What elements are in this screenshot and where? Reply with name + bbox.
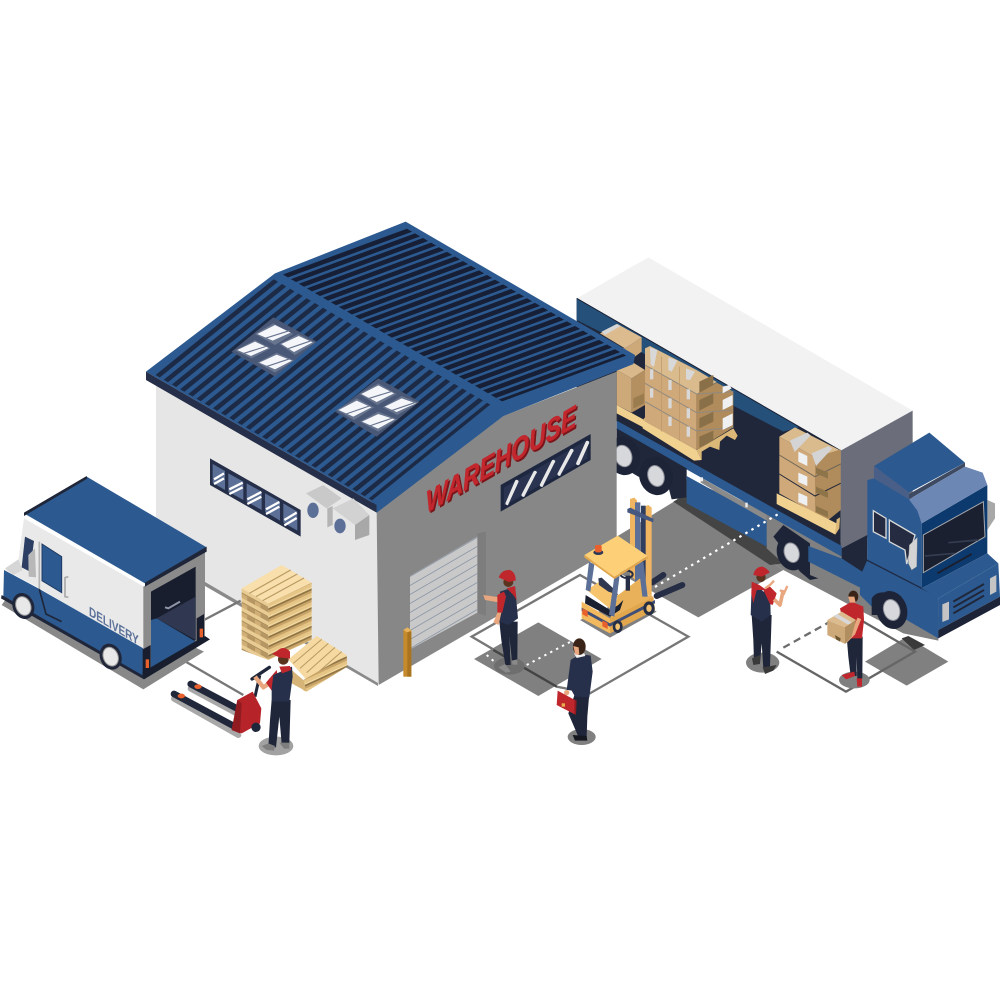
skylight 1 — [232, 317, 317, 377]
tall stack end faces — [268, 583, 312, 660]
box — [827, 612, 856, 644]
white wall base strip — [205, 580, 378, 686]
shirt — [497, 592, 506, 613]
bumper bottom — [938, 597, 1000, 638]
marked rectangle — [777, 622, 915, 692]
near hand — [765, 581, 774, 588]
windshield lower slot — [937, 554, 972, 573]
trousers — [568, 693, 589, 737]
seat back — [598, 578, 618, 595]
air conditioning units — [306, 485, 369, 540]
trailer chassis — [617, 428, 687, 499]
legs — [847, 637, 863, 679]
trailer roof — [577, 257, 913, 451]
shirt shoulder — [507, 586, 517, 600]
white side panel — [5, 518, 144, 648]
sign: WAREHOUSE: WAREHOUSE — [425, 398, 578, 519]
ground shadow — [494, 657, 525, 675]
window — [22, 537, 34, 572]
front gable window — [501, 434, 591, 512]
handle grip — [252, 667, 269, 679]
roof left panel — [146, 273, 502, 505]
red shirt — [840, 602, 864, 638]
roof — [24, 477, 207, 583]
safety post — [403, 627, 411, 677]
grille panel — [938, 563, 1000, 630]
box divisions — [645, 365, 733, 431]
headlight left — [942, 602, 949, 622]
shipping labels — [723, 385, 733, 430]
bumper top — [922, 553, 998, 598]
mast — [627, 498, 654, 597]
legs — [752, 615, 772, 668]
roller door — [410, 537, 477, 649]
delivery van — [1, 476, 210, 689]
arm — [255, 677, 273, 687]
cab pillars — [586, 562, 648, 617]
body tower — [610, 578, 653, 619]
front trailer wheel — [772, 525, 818, 580]
front pallet stack — [777, 427, 841, 535]
roller door and post — [403, 532, 486, 677]
rear dark pillars — [143, 614, 204, 677]
forklift shadow — [580, 597, 657, 638]
dotted route to truck — [655, 513, 780, 587]
forks — [652, 575, 682, 596]
grey standing zone — [474, 622, 602, 696]
dark patch — [902, 636, 925, 650]
dark marking line — [493, 650, 557, 687]
hard hat — [753, 567, 770, 577]
floor markings by the forklift — [472, 575, 688, 696]
marked rectangle — [472, 575, 688, 693]
forklift wheels — [613, 601, 655, 633]
door seam — [37, 542, 42, 589]
rear bumper — [142, 636, 210, 679]
red shirt — [763, 587, 777, 605]
handle — [253, 677, 259, 697]
face — [573, 646, 579, 655]
windshield — [923, 502, 985, 573]
door recess — [477, 532, 486, 616]
worker carrying box — [827, 591, 870, 688]
legs — [499, 622, 518, 665]
main stack left face — [645, 348, 697, 450]
cargo opening — [151, 567, 196, 667]
hood — [5, 559, 23, 575]
main stack right face — [697, 383, 733, 450]
grille slats — [953, 584, 984, 613]
seat deck — [587, 582, 618, 610]
shoes — [498, 659, 517, 673]
truck chassis and cab — [602, 421, 938, 638]
chassis right face — [610, 597, 655, 633]
rear wheel 2 — [634, 452, 678, 500]
grey zone — [865, 637, 948, 686]
engine cover dark — [585, 595, 623, 617]
steering wheel — [621, 571, 633, 591]
side mirror — [908, 537, 917, 570]
tall stack side faces — [242, 588, 268, 660]
forklift — [580, 498, 682, 638]
shoes — [262, 743, 289, 751]
rear side window — [873, 511, 886, 538]
jack wheel — [251, 723, 261, 732]
wipers — [925, 540, 978, 556]
roof right stripes — [345, 252, 564, 379]
grey front wall — [377, 372, 617, 685]
jack shadow — [174, 689, 238, 735]
dashed line — [783, 623, 828, 648]
trailer interior — [577, 298, 841, 548]
upper rear boxes — [600, 324, 642, 370]
raised hand — [780, 586, 787, 593]
worker with pallet jack — [255, 648, 293, 755]
roof — [874, 433, 965, 493]
cab wheel — [871, 587, 912, 633]
red body — [232, 692, 261, 733]
cargo on trailer — [600, 324, 841, 535]
headlight right — [990, 575, 996, 595]
box icons — [699, 375, 713, 447]
overall — [499, 587, 518, 625]
shoulder — [279, 666, 291, 673]
rear stack — [617, 362, 645, 427]
arm pointing — [483, 595, 500, 603]
red shoes — [842, 672, 862, 687]
cab side — [860, 478, 938, 638]
face — [848, 597, 856, 603]
door lower lines — [39, 589, 62, 622]
head — [573, 638, 586, 655]
roof fascia — [146, 372, 377, 513]
dotted route — [487, 639, 575, 677]
legs — [268, 700, 291, 747]
arm — [774, 590, 783, 605]
briefcase — [557, 691, 577, 715]
roof fairing edge — [909, 463, 965, 499]
businessman with briefcase — [557, 638, 596, 745]
scarf — [751, 582, 767, 603]
white side wall — [156, 383, 380, 683]
hand — [564, 690, 569, 695]
truck cab — [860, 433, 1000, 638]
sign: WAREHOUSE — [425, 398, 579, 521]
hard hat — [272, 648, 290, 659]
chassis stripe — [582, 600, 655, 627]
gable rake — [377, 355, 635, 513]
far mirror — [987, 500, 995, 530]
sill — [1, 595, 144, 679]
pallet stacks — [242, 565, 347, 692]
rear wheel — [96, 640, 126, 673]
skylight 2 — [335, 378, 419, 437]
door handle — [65, 577, 68, 597]
head — [278, 654, 289, 665]
tail lights — [582, 608, 608, 629]
shoe — [573, 735, 587, 741]
main pallet — [643, 420, 738, 461]
box seams — [662, 357, 679, 441]
roof fairing — [874, 466, 909, 499]
body shade — [232, 700, 242, 733]
collar — [574, 653, 585, 658]
left wall window — [210, 458, 301, 537]
canopy — [584, 536, 648, 577]
front wheel — [8, 590, 38, 622]
door window — [889, 520, 915, 564]
head — [503, 577, 513, 587]
warehouse building — [146, 222, 635, 685]
trailer interior upper wall — [577, 298, 800, 432]
tall stack top — [242, 565, 312, 603]
forks — [174, 684, 237, 727]
left arm — [493, 613, 501, 625]
trailer bed rail — [617, 421, 842, 557]
mirror — [28, 548, 36, 577]
interior wall — [157, 597, 196, 640]
door window — [42, 544, 62, 593]
roof side trim — [24, 476, 87, 516]
tail lights — [146, 629, 203, 668]
interior floor — [151, 618, 196, 668]
fork tips — [178, 684, 202, 698]
floor markings by the box carrier — [777, 622, 948, 692]
second pallet — [288, 636, 347, 692]
shoes — [752, 655, 777, 674]
cab rear dark section — [842, 535, 867, 578]
trailer top edge — [577, 298, 841, 451]
ground shadow — [568, 729, 596, 745]
visor — [909, 467, 987, 523]
delivery truck — [577, 257, 913, 550]
overalls — [751, 583, 771, 622]
trailer end face — [841, 411, 913, 550]
far arm — [845, 618, 859, 642]
ground shadow — [839, 672, 870, 688]
head — [756, 573, 766, 582]
worker gesturing — [746, 567, 787, 674]
worker at door — [483, 570, 525, 675]
rear wheel 1 — [602, 432, 645, 480]
overalls — [272, 667, 293, 702]
red sleeve — [266, 670, 281, 692]
roof left stripes — [215, 327, 431, 453]
sign: WAREHOUSE: WAREHOUSE — [427, 400, 579, 521]
van floor marking lines — [180, 601, 243, 695]
chassis left face — [582, 602, 610, 633]
beacon — [593, 545, 603, 555]
main stack top — [645, 346, 717, 394]
side skirt panel — [687, 476, 767, 547]
lower blue body — [3, 570, 143, 677]
hard hat — [499, 570, 516, 582]
tape strips — [650, 347, 695, 437]
door slats — [410, 537, 477, 649]
rear frame — [143, 552, 205, 673]
door handle inside — [165, 602, 180, 608]
pallet jack — [174, 667, 269, 735]
roof rear trim — [145, 547, 207, 587]
roof right panel — [275, 222, 635, 513]
ground shadow — [746, 653, 779, 673]
front face — [922, 485, 987, 588]
head — [848, 591, 858, 603]
canopy edge — [584, 555, 648, 579]
text: DELIVERY: DELIVERY — [89, 604, 139, 649]
floor: truck bay markings — [617, 480, 938, 641]
lower side line — [867, 560, 938, 597]
ground shadow — [259, 737, 293, 755]
cab lower chassis — [808, 546, 938, 638]
jacket — [567, 655, 593, 697]
ground shadow — [2, 593, 204, 689]
